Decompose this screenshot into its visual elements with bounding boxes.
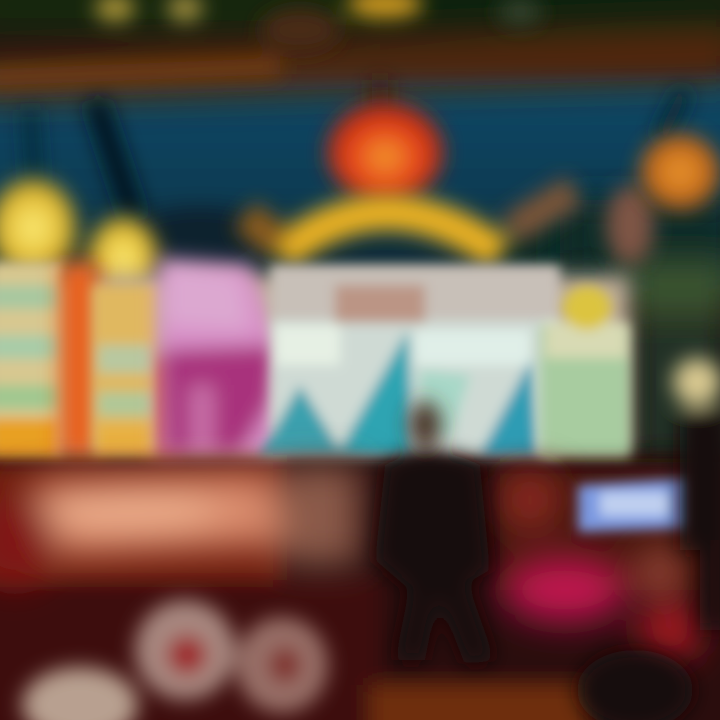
blue screen — [578, 478, 690, 532]
red dome — [327, 102, 443, 202]
pink and purple column — [158, 258, 280, 458]
hanging lamp cords — [30, 80, 685, 220]
orange column — [60, 262, 176, 457]
pale green column — [540, 286, 630, 460]
standing figure — [375, 401, 495, 665]
right figure — [673, 358, 720, 630]
floor and lower dark area — [0, 462, 720, 720]
magenta crowd — [500, 470, 702, 662]
ceiling lights — [0, 0, 542, 78]
right orange lamp — [640, 134, 720, 210]
left yellow lamps — [0, 178, 159, 300]
column backdrop — [0, 275, 630, 455]
yellow-green column — [92, 285, 158, 457]
foreground dark head — [577, 650, 693, 720]
background wall — [0, 70, 720, 290]
striped column left — [0, 262, 64, 458]
right wall dark side — [560, 200, 720, 460]
ceiling band — [0, 0, 720, 100]
pink table — [0, 465, 360, 585]
balloons — [22, 600, 328, 720]
yellow arch — [245, 185, 654, 265]
white and teal panel — [258, 265, 560, 460]
